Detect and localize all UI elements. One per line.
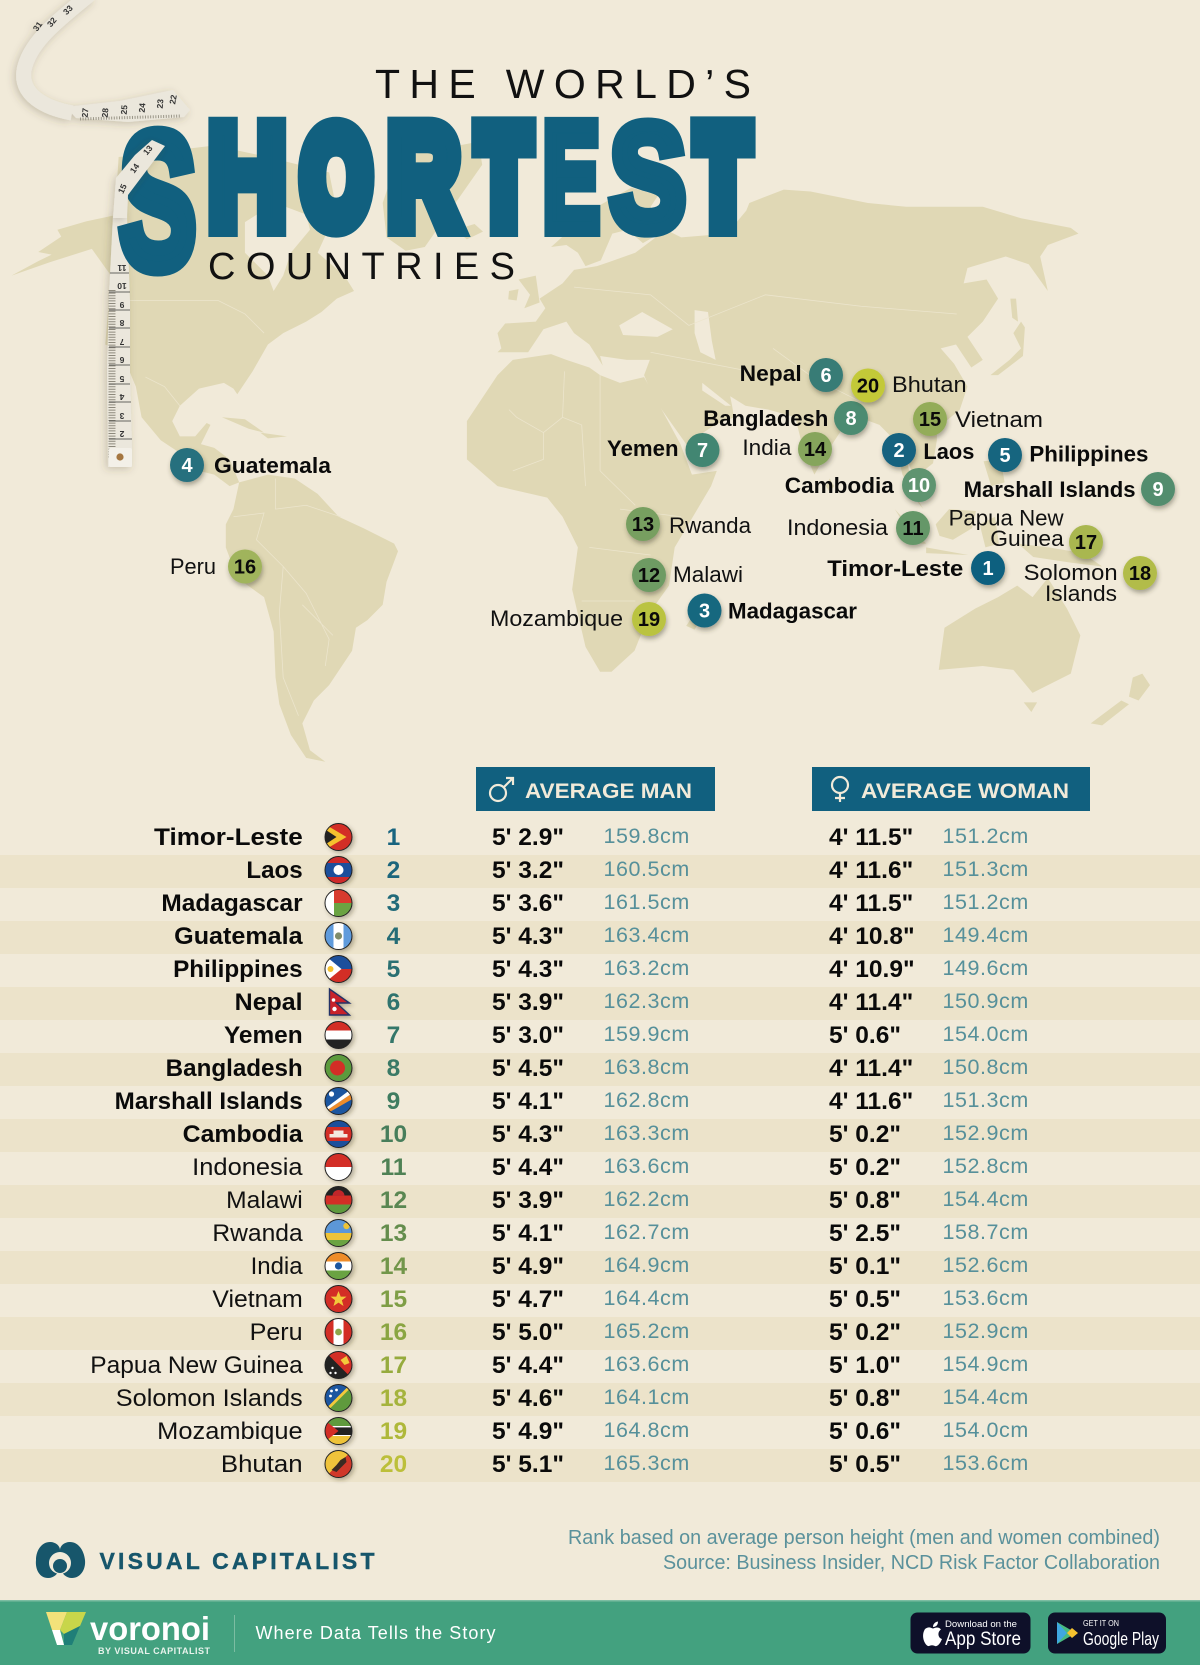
row: Yemen: 7: [387, 1022, 400, 1049]
marker: 1 Timor-Leste: 1: [982, 558, 994, 580]
icon: flag of Nepal: [330, 989, 350, 1015]
marker: 12 Malawi: 12: [638, 565, 660, 587]
row: Yemen: 159.9cm: [604, 1022, 690, 1046]
tape measure: top curl section: 22: [167, 94, 179, 105]
marker: 10 Cambodia: [785, 468, 936, 502]
row: Guatemala: Guatemala: [174, 923, 303, 950]
row: Bhutan: [221, 1450, 1029, 1478]
row: Cambodia: [183, 1120, 1029, 1148]
source note: [568, 1527, 1160, 1574]
row: Indonesia: 152.8cm: [942, 1154, 1029, 1178]
marker: 9 Marshall Islands: 9: [1152, 479, 1164, 501]
row: Nepal: 150.9cm: [942, 989, 1029, 1013]
marker: 5 Philippines: [988, 438, 1148, 472]
icon: Voronoi logo: [46, 1612, 86, 1645]
title line: COUNTRIES: COUNTRIES: [208, 246, 515, 288]
marker: 8 Bangladesh: 8: [845, 408, 857, 430]
row: Indonesia: 5' 4.4": [492, 1154, 564, 1181]
marker: 1 Timor-Leste: [827, 551, 1005, 585]
header: average woman: AVERAGE WOMAN: [861, 780, 1069, 803]
row: Nepal: 4' 11.4": [829, 989, 913, 1016]
icon: flag of Peru: [324, 1318, 352, 1346]
row: Yemen: 5' 3.0": [492, 1022, 564, 1049]
marker: 15 Vietnam: [913, 402, 1043, 436]
row: Bangladesh: 8: [387, 1055, 400, 1082]
tape measure: top curl section: 31: [31, 19, 45, 33]
icon: flag of Guatemala: [324, 922, 352, 950]
source note: Source: Business Insider, NCD Risk Factor Collaboration: [663, 1552, 1160, 1574]
tape measure: lower hanging section: 5: [119, 374, 124, 384]
source note: Rank based on average person height (men and women combined): [568, 1527, 1160, 1549]
row: Indonesia: 5' 0.2": [829, 1154, 901, 1181]
tape measure: lower hanging section: 11: [117, 263, 126, 273]
row: Marshall Islands: 162.8cm: [604, 1088, 690, 1112]
marker: 5 Philippines: Philippines: [1029, 442, 1148, 466]
row: Guatemala: [174, 922, 1029, 950]
marker: 17 Papua New Guinea: 17: [1075, 532, 1097, 554]
row: Rwanda: 5' 4.1": [492, 1220, 564, 1247]
row: Malawi: Malawi: [226, 1187, 303, 1214]
icon: flag of Cambodia: [324, 1120, 352, 1148]
row: Madagascar: 151.2cm: [942, 890, 1029, 914]
row: Madagascar: 4' 11.5": [829, 890, 913, 917]
row: Laos: 2: [387, 857, 400, 884]
title word: SHORTEST: S: [119, 95, 196, 308]
title word: SHORTEST: T: [478, 100, 529, 252]
marker: 20 Bhutan: [851, 368, 967, 402]
row: Bangladesh: 163.8cm: [604, 1055, 690, 1079]
row: Timor-Leste: 5' 2.9": [492, 824, 564, 851]
row: India: 164.9cm: [604, 1253, 690, 1277]
row: Vietnam: [212, 1285, 1029, 1313]
marker: 6 Nepal: 6: [820, 365, 832, 387]
badge: App Store: Download on the: [945, 1619, 1017, 1630]
icon: flag of India: [324, 1252, 352, 1280]
icon: male symbol: [490, 778, 513, 801]
marker: 3 Madagascar: Madagascar: [728, 598, 857, 624]
row: Timor-Leste: 151.2cm: [942, 824, 1029, 848]
marker: 9 Marshall Islands: [964, 472, 1175, 506]
row: Mozambique: Mozambique: [157, 1418, 303, 1445]
marker: 12 Malawi: [632, 558, 743, 592]
row: Mozambique: 19: [380, 1418, 407, 1445]
marker: 18 Solomon Islands: [1024, 556, 1157, 606]
row: Rwanda: Rwanda: [212, 1220, 303, 1247]
header: average man: AVERAGE MAN: [525, 780, 692, 803]
title word: SHORTEST: T: [698, 100, 748, 252]
marker: 6 Nepal: [740, 358, 843, 392]
row: India: 14: [380, 1253, 407, 1280]
row: Malawi: [226, 1186, 1029, 1214]
marker: 7 Yemen: [607, 433, 720, 467]
marker: 4 Guatemala: 4: [181, 455, 193, 477]
marker: 10 Cambodia: 10: [908, 475, 930, 497]
row: Cambodia: 5' 0.2": [829, 1121, 901, 1148]
row: Papua New Guinea: 163.6cm: [604, 1352, 690, 1376]
marker: 8 Bangladesh: Bangladesh: [703, 406, 828, 431]
header: average man: [476, 767, 715, 811]
icon: female symbol: [832, 777, 848, 802]
row: Peru: Peru: [250, 1319, 303, 1346]
row: Laos: 4' 11.6": [829, 857, 913, 884]
row: Rwanda: [212, 1219, 1029, 1247]
row: Timor-Leste: [154, 823, 1029, 851]
footer bar: BY VISUAL CAPITALIST: [98, 1646, 210, 1656]
row: Solomon Islands: [116, 1384, 1029, 1412]
logo: Visual Capitalist: VISUAL CAPITALIST: [100, 1548, 374, 1574]
row: Marshall Islands: 5' 4.1": [492, 1088, 564, 1115]
icon: flag of Laos: [324, 856, 352, 884]
tape measure: top curl section: 32: [45, 15, 59, 29]
row: Indonesia: Indonesia: [192, 1154, 303, 1181]
row: Vietnam: 5' 0.5": [829, 1286, 901, 1313]
row: Madagascar: 5' 3.6": [492, 890, 564, 917]
row: Vietnam: Vietnam: [212, 1286, 303, 1313]
row: Timor-Leste: 159.8cm: [604, 824, 690, 848]
row: Bhutan: 5' 5.1": [492, 1451, 564, 1478]
marker: 9 Marshall Islands: Marshall Islands: [964, 477, 1136, 502]
row: Cambodia: 5' 4.3": [492, 1121, 564, 1148]
marker: 7 Yemen: 7: [697, 440, 708, 462]
marker: 3 Madagascar: [688, 594, 857, 628]
row: Yemen: 154.0cm: [942, 1022, 1029, 1046]
row: Cambodia: Cambodia: [183, 1121, 303, 1148]
marker: 7 Yemen: Yemen: [607, 436, 678, 461]
icon: Visual Capitalist binocular mark: [36, 1542, 85, 1578]
badge: App Store: App Store: [945, 1629, 1021, 1650]
row: Nepal: 6: [387, 989, 400, 1016]
row: Timor-Leste: Timor-Leste: [154, 824, 303, 851]
marker: 6 Nepal: Nepal: [740, 361, 802, 386]
row: Mozambique: 5' 4.9": [492, 1418, 564, 1445]
row: Peru: 5' 5.0": [492, 1319, 564, 1346]
row: Peru: [250, 1318, 1029, 1346]
row: India: 5' 4.9": [492, 1253, 564, 1280]
row: Bhutan: 165.3cm: [604, 1451, 690, 1475]
marker: 18 Solomon Islands: 18: [1129, 563, 1151, 585]
row: Rwanda: 162.7cm: [604, 1220, 690, 1244]
title: [119, 61, 751, 308]
marker: 15 Vietnam: Vietnam: [955, 407, 1043, 432]
row: Solomon Islands: 5' 4.6": [492, 1385, 564, 1412]
marker: 16 Peru: 16: [234, 556, 256, 578]
row: Mozambique: 154.0cm: [942, 1418, 1029, 1442]
badge: Google Play: Google Play: [1083, 1629, 1159, 1649]
row: Laos: Laos: [246, 857, 303, 884]
row: Guatemala: 163.4cm: [604, 923, 690, 947]
marker: 3 Madagascar: 3: [699, 600, 710, 622]
title word: SHORTEST: [119, 92, 748, 308]
row: Laos: 160.5cm: [604, 857, 690, 881]
tape measure: section crossing the S: 13: [141, 143, 155, 157]
row: Mozambique: 164.8cm: [604, 1418, 690, 1442]
tape measure: lower hanging section: 8: [119, 318, 124, 328]
row: Peru: 152.9cm: [942, 1319, 1029, 1343]
icon: flag of Malawi: [324, 1186, 352, 1214]
map markers: [170, 358, 1175, 636]
row: Rwanda: 158.7cm: [942, 1220, 1029, 1244]
tape measure: lower hanging section: 7: [119, 337, 124, 347]
row: Rwanda: 5' 2.5": [829, 1220, 901, 1247]
footer bar: [0, 1600, 1200, 1665]
marker: 19 Mozambique: 19: [638, 609, 660, 631]
row: Laos: 151.3cm: [942, 857, 1029, 881]
row: Bangladesh: 150.8cm: [942, 1055, 1029, 1079]
row: Yemen: [224, 1021, 1029, 1050]
row: Nepal: 5' 3.9": [492, 989, 564, 1016]
row: India: [251, 1252, 1029, 1280]
tape measure: lower hanging section: 3: [119, 411, 124, 421]
row: Solomon Islands: Solomon Islands: [116, 1385, 303, 1412]
row: Solomon Islands: 5' 0.8": [829, 1385, 901, 1412]
marker: 19 Mozambique: Mozambique: [490, 606, 623, 631]
marker: 16 Peru: [170, 550, 262, 584]
row: Marshall Islands: 151.3cm: [942, 1088, 1029, 1112]
title word: SHORTEST: R: [388, 96, 460, 258]
row: Cambodia: 152.9cm: [942, 1121, 1029, 1145]
title word: SHORTEST: S: [610, 94, 686, 262]
marker: 4 Guatemala: Guatemala: [214, 453, 332, 478]
row: India: 5' 0.1": [829, 1253, 901, 1280]
row: Rwanda: 13: [380, 1220, 407, 1247]
marker: 4 Guatemala: [170, 448, 332, 482]
tape measure: section crossing the S: 14: [128, 161, 142, 175]
row: Bangladesh: Bangladesh: [166, 1055, 303, 1082]
marker: 11 Indonesia: 11: [902, 518, 924, 540]
tape measure: top curl section: 23: [155, 98, 165, 109]
marker: 12 Malawi: Malawi: [673, 562, 743, 587]
icon: flag of Madagascar: [324, 889, 352, 917]
marker: 19 Mozambique: [490, 602, 666, 636]
row: Cambodia: 10: [380, 1121, 407, 1148]
row: Vietnam: 164.4cm: [604, 1286, 690, 1310]
marker: 1 Timor-Leste: Timor-Leste: [827, 556, 963, 581]
row: Bhutan: 20: [380, 1451, 407, 1478]
icon: flag of Solomon Islands: [324, 1384, 352, 1412]
tape measure: lower hanging section: 6: [119, 355, 124, 365]
marker: 13 Rwanda: Rwanda: [669, 513, 752, 538]
marker: 17 Papua New Guinea: Papua New: [949, 506, 1064, 530]
row: Guatemala: 5' 4.3": [492, 923, 564, 950]
marker: 17 Papua New Guinea: Guinea: [990, 526, 1065, 551]
row: Madagascar: 161.5cm: [604, 890, 690, 914]
logo: Visual Capitalist: [36, 1542, 375, 1578]
icon: flag of Timor-Leste: [324, 823, 352, 851]
row: Malawi: 5' 3.9": [492, 1187, 564, 1214]
icon: flag of the Philippines: [324, 955, 352, 983]
row: Guatemala: 149.4cm: [942, 923, 1029, 947]
badge: App Store: [910, 1612, 1030, 1654]
tape measure: top curl section: 33: [61, 3, 75, 17]
marker: 13 Rwanda: [626, 507, 752, 541]
row: Papua New Guinea: 5' 4.4": [492, 1352, 564, 1379]
row: Philippines: 149.6cm: [942, 956, 1029, 980]
row: Guatemala: 4: [387, 923, 401, 950]
tape measure: top curl section: 28: [100, 107, 110, 118]
row: Bhutan: 5' 0.5": [829, 1451, 901, 1478]
row: Madagascar: 3: [387, 890, 400, 917]
row: Marshall Islands: 9: [387, 1088, 400, 1115]
row: Nepal: Nepal: [235, 989, 303, 1016]
title line: THE WORLD'S: THE WORLD’S: [375, 61, 751, 107]
row: Philippines: [173, 955, 1029, 983]
tape measure: lower hanging section: 2: [119, 429, 124, 439]
row: Malawi: 154.4cm: [942, 1187, 1029, 1211]
row: Peru: 16: [380, 1319, 407, 1346]
row: Papua New Guinea: 5' 1.0": [829, 1352, 901, 1379]
tape measure: section crossing the S: [113, 140, 165, 218]
row: Malawi: 5' 0.8": [829, 1187, 901, 1214]
row: Philippines: 4' 10.9": [829, 956, 915, 983]
marker: 11 Indonesia: [787, 511, 930, 545]
marker: 2 Laos: Laos: [923, 439, 974, 464]
row: Mozambique: [157, 1417, 1029, 1445]
row: Philippines: Philippines: [173, 956, 303, 983]
marker: 10 Cambodia: Cambodia: [785, 473, 895, 498]
marker: 16 Peru: Peru: [170, 554, 216, 579]
row: Cambodia: 163.3cm: [604, 1121, 690, 1145]
world map: [11, 142, 1150, 762]
row: Indonesia: 163.6cm: [604, 1154, 690, 1178]
row: Vietnam: 5' 4.7": [492, 1286, 564, 1313]
icon: flag of Rwanda: [324, 1219, 352, 1247]
row: Vietnam: 15: [380, 1286, 407, 1313]
marker: 13 Rwanda: 13: [632, 514, 654, 536]
row: Vietnam: 153.6cm: [942, 1286, 1029, 1310]
tape measure: section crossing the S: 15: [116, 182, 129, 195]
row: Timor-Leste: 1: [387, 824, 400, 851]
row: Papua New Guinea: 17: [380, 1352, 407, 1379]
row: Philippines: 163.2cm: [604, 956, 690, 980]
row: Peru: 165.2cm: [604, 1319, 690, 1343]
row: Solomon Islands: 18: [380, 1385, 407, 1412]
marker: 17 Papua New Guinea: [949, 506, 1103, 559]
row: Nepal: [235, 989, 1029, 1016]
row: Bhutan: 153.6cm: [942, 1451, 1029, 1475]
row: Timor-Leste: 4' 11.5": [829, 824, 913, 851]
row: Guatemala: 4' 10.8": [829, 923, 915, 950]
marker: 20 Bhutan: Bhutan: [892, 372, 967, 397]
marker: 18 Solomon Islands: Solomon: [1024, 560, 1118, 585]
tape measure: top curl section: 25: [119, 104, 129, 115]
icon: flag of Yemen: [324, 1021, 352, 1050]
marker: 8 Bangladesh: [703, 401, 868, 435]
row: Malawi: 12: [380, 1187, 407, 1214]
row: Indonesia: 11: [381, 1154, 406, 1181]
marker: 14 India: 14: [804, 439, 827, 461]
title word: SHORTEST: H: [208, 94, 287, 260]
icon: flag of the Marshall Islands: [324, 1087, 352, 1115]
data table: [90, 823, 1029, 1478]
row: Malawi: 162.2cm: [604, 1187, 690, 1211]
marker: 2 Laos: [882, 433, 974, 467]
row: Madagascar: Madagascar: [161, 890, 303, 917]
row: Yemen: Yemen: [224, 1022, 303, 1049]
marker: 20 Bhutan: 20: [857, 376, 879, 398]
icon: flag of Indonesia: [324, 1153, 352, 1181]
row: Madagascar: [161, 889, 1029, 917]
marker: 18 Solomon Islands: Islands: [1045, 581, 1117, 606]
row: India: India: [251, 1253, 303, 1280]
row: Marshall Islands: 4' 11.6": [829, 1088, 913, 1115]
row: Mozambique: 5' 0.6": [829, 1418, 901, 1445]
row: Philippines: 5' 4.3": [492, 956, 564, 983]
row: Peru: 5' 0.2": [829, 1319, 901, 1346]
row: Solomon Islands: 164.1cm: [604, 1385, 690, 1409]
badge: Google Play: [1048, 1612, 1166, 1654]
row: Laos: 5' 3.2": [492, 857, 564, 884]
row: Papua New Guinea: [90, 1351, 1029, 1379]
row: Nepal: 162.3cm: [604, 989, 690, 1013]
icon: flag of Papua New Guinea: [324, 1351, 352, 1379]
marker: 2 Laos: 2: [893, 440, 905, 462]
wordmark: voronoi: voronoi: [90, 1610, 210, 1647]
marker: 11 Indonesia: Indonesia: [787, 515, 889, 540]
icon: flag of Vietnam: [324, 1285, 352, 1313]
title word: SHORTEST: O: [302, 102, 370, 254]
row: Papua New Guinea: Papua New Guinea: [90, 1352, 303, 1379]
row: India: 152.6cm: [942, 1253, 1029, 1277]
tape measure: top curl section: [24, 0, 190, 122]
tape measure: lower hanging section: [107, 215, 132, 467]
title word: SHORTEST: E: [543, 92, 599, 263]
header: average woman: [812, 767, 1090, 811]
tagline: Where Data Tells the Story: [256, 1623, 496, 1643]
icon: flag of Bhutan: [324, 1450, 352, 1478]
row: Bhutan: Bhutan: [221, 1451, 303, 1478]
icon: flag of Mozambique: [324, 1417, 352, 1445]
row: Yemen: 5' 0.6": [829, 1022, 901, 1049]
row: Philippines: 5: [387, 956, 400, 983]
marker: 5 Philippines: 5: [999, 445, 1011, 467]
marker: 14 India: [742, 432, 832, 466]
row: Indonesia: [192, 1153, 1029, 1181]
row: Bangladesh: 4' 11.4": [829, 1055, 913, 1082]
row: Solomon Islands: 154.4cm: [942, 1385, 1029, 1409]
marker: 15 Vietnam: 15: [919, 409, 941, 431]
row: Bangladesh: 5' 4.5": [492, 1055, 564, 1082]
tape measure: lower hanging section: 9: [119, 300, 124, 310]
tape measure: lower hanging section: 10: [117, 281, 127, 291]
tape measure: top curl section: 24: [137, 102, 147, 113]
row: Marshall Islands: Marshall Islands: [115, 1088, 303, 1115]
row: Laos: [246, 856, 1029, 884]
marker: 14 India: India: [742, 435, 792, 460]
tape measure: top curl section: 27: [80, 107, 90, 118]
icon: flag of Bangladesh: [324, 1054, 352, 1082]
tape measure: lower hanging section: 4: [119, 392, 124, 402]
badge: Google Play: GET IT ON: [1083, 1618, 1119, 1628]
row: Marshall Islands: [115, 1087, 1029, 1115]
row: Papua New Guinea: 154.9cm: [942, 1352, 1029, 1376]
row: Bangladesh: [166, 1054, 1029, 1082]
